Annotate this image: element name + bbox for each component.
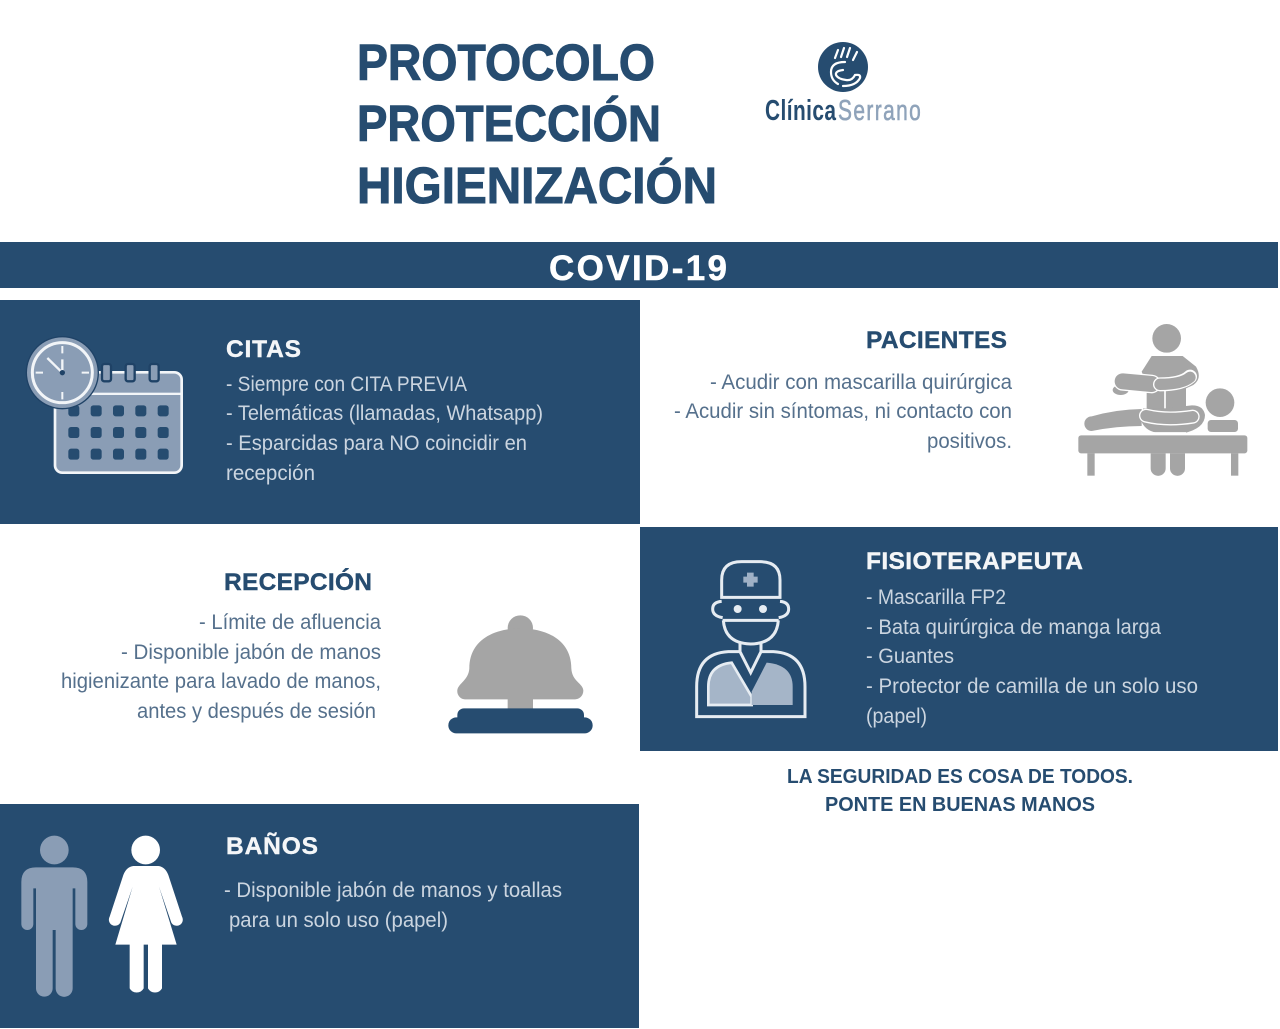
text: recepción list: - Disponible jabón de manos — [121, 641, 381, 664]
slogan — [787, 766, 1133, 816]
panel: pacientes — [674, 324, 1247, 476]
text: citas list: recepción — [226, 462, 315, 485]
text: pacientes list — [674, 371, 1012, 453]
title: HIGIENIZACIÓN — [357, 157, 717, 214]
slogan: LA SEGURIDAD ES COSA DE TODOS. — [787, 766, 1133, 788]
text: recepción list: higienizante para lavado de manos, — [61, 670, 381, 693]
text: recepción list: antes y después de sesión — [137, 700, 376, 723]
heading: pacientes: PACIENTES — [866, 327, 1007, 354]
panel: citas — [0, 300, 640, 524]
logo: Clínica Serrano: Serrano — [838, 95, 921, 127]
slogan: PONTE EN BUENAS MANOS — [825, 794, 1095, 816]
text: baños list: - Disponible jabón de manos y toallas — [224, 879, 562, 902]
heading: baños: BAÑOS — [226, 832, 318, 860]
logo: Clínica Serrano: Clínica — [765, 95, 837, 127]
text: citas list: - Esparcidas para NO coincidir en — [226, 432, 527, 455]
text: pacientes list: - Acudir sin síntomas, ni contacto con — [674, 400, 1012, 423]
heading: fisioterapeuta: FISIOTERAPEUTA — [866, 548, 1083, 575]
text: pacientes list: positivos. — [927, 430, 1012, 453]
icon: reception bell — [448, 615, 593, 733]
banner: COVID-19: COVID-19 — [549, 249, 727, 288]
heading: recepción: RECEPCIÓN — [224, 568, 372, 596]
panel: recepción — [61, 568, 593, 733]
text: pacientes list: - Acudir con mascarilla quirúrgica — [710, 371, 1012, 394]
text: citas list — [226, 373, 543, 485]
text: fisioterapeuta list: - Guantes — [866, 645, 954, 668]
text: fisioterapeuta list — [866, 586, 1198, 728]
icon: physiotherapist treating patient — [1078, 324, 1247, 476]
banner: COVID-19 — [0, 242, 1278, 288]
text: baños list: para un solo uso (papel) — [229, 909, 448, 932]
text: baños list — [224, 879, 562, 932]
text: recepción list — [61, 611, 381, 723]
title: PROTECCIÓN — [357, 95, 661, 152]
panel: fisioterapeuta — [640, 527, 1278, 751]
icon: doctor with mask — [697, 562, 805, 717]
panel: baños — [0, 804, 639, 1028]
text: fisioterapeuta list: - Bata quirúrgica de manga larga — [866, 616, 1161, 639]
icon: man and woman — [21, 836, 183, 997]
logo: Clínica Serrano — [765, 42, 921, 127]
title — [357, 34, 717, 214]
heading: citas: CITAS — [226, 336, 301, 363]
text: recepción list: - Límite de afluencia — [199, 611, 381, 634]
text: fisioterapeuta list: - Protector de camilla de un solo uso — [866, 675, 1198, 698]
text: fisioterapeuta list: (papel) — [866, 705, 927, 728]
text: fisioterapeuta list: - Mascarilla FP2 — [866, 586, 1006, 609]
text: citas list: - Siempre con CITA PREVIA — [226, 373, 467, 396]
icon: calendar and clock — [26, 336, 182, 473]
text: citas list: - Telemáticas (llamadas, Whatsapp) — [226, 402, 543, 425]
title: PROTOCOLO — [357, 34, 655, 91]
